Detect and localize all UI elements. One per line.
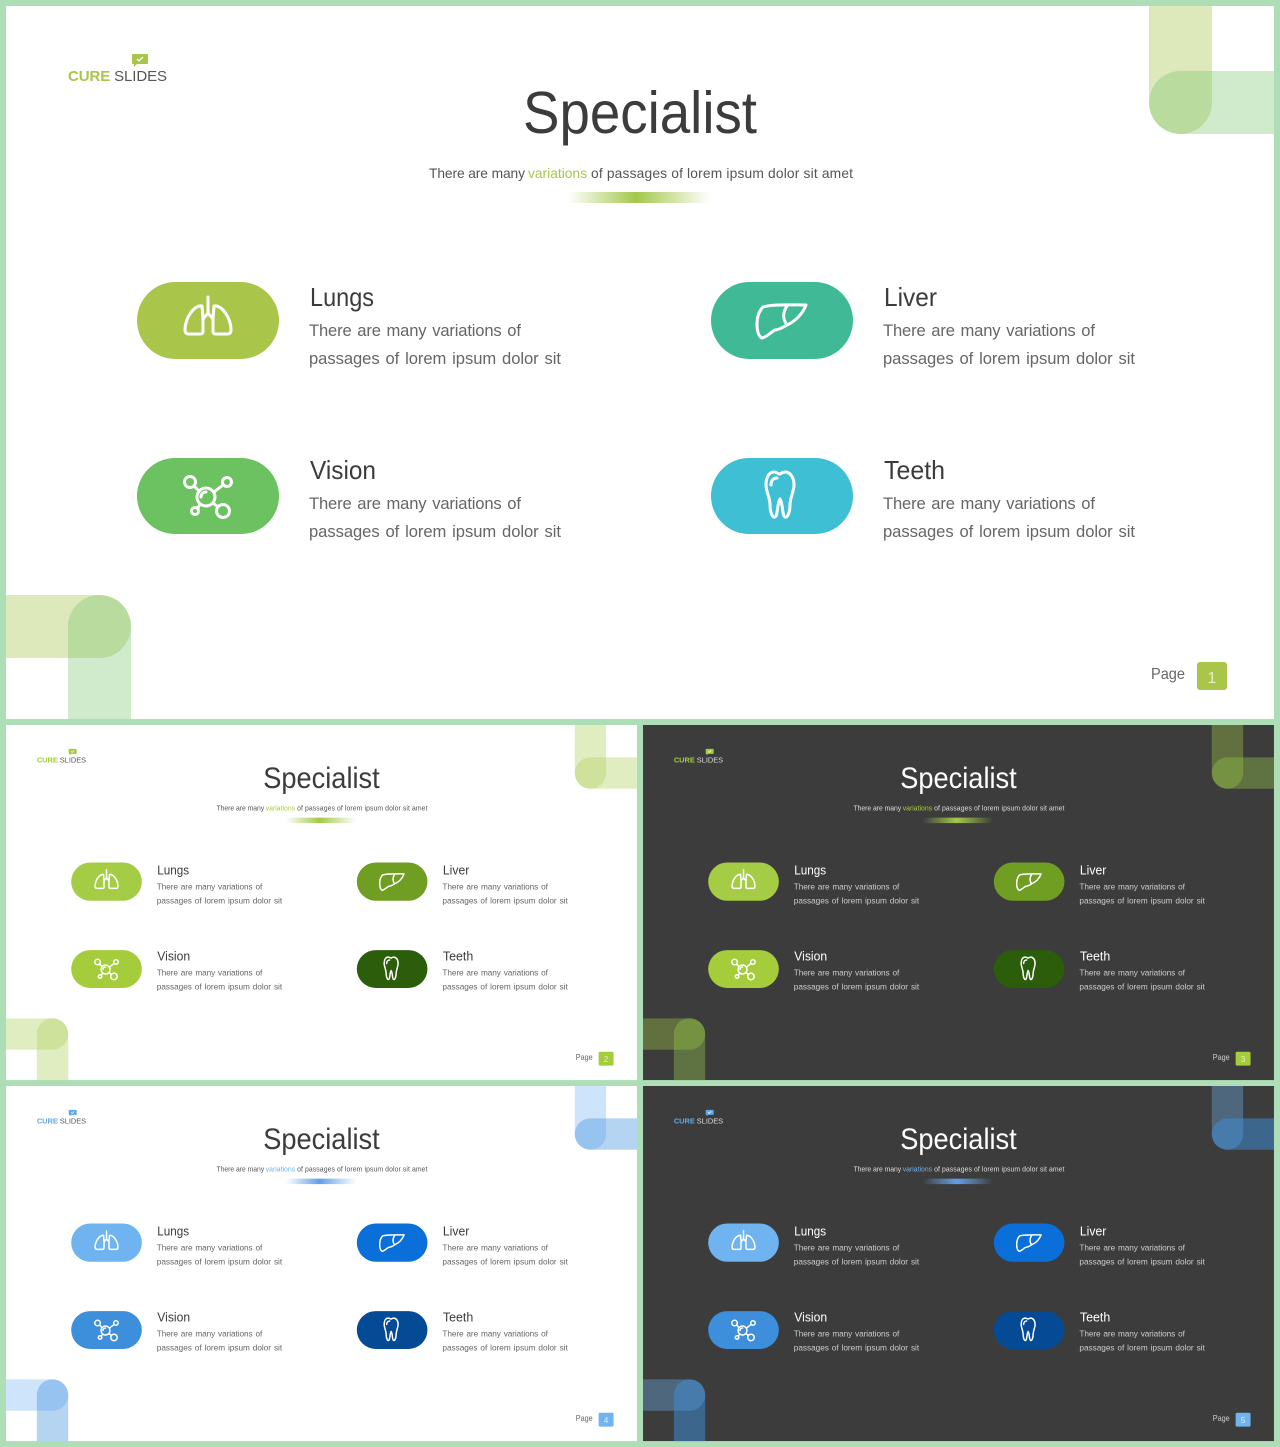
- icon pill: molecule: [708, 1311, 779, 1349]
- subtitle: of passages of lorem ipsum dolor sit amet: [297, 806, 428, 813]
- icon pill: liver: [994, 1223, 1064, 1262]
- subtitle: of passages of lorem ipsum dolor sit amet: [591, 166, 853, 181]
- gradient underline: [923, 1179, 993, 1184]
- text: Teeth: passages of lorem ipsum dolor sit: [1079, 982, 1205, 991]
- text: Liver: passages of lorem ipsum dolor sit: [1079, 896, 1205, 905]
- text: Liver: There are many variations of: [442, 1243, 549, 1252]
- subtitle: [216, 1167, 428, 1174]
- corner decoration: bottom left: [643, 1379, 705, 1441]
- text: Liver: passages of lorem ipsum dolor sit: [442, 1257, 568, 1266]
- icon pill: lungs: [137, 282, 279, 359]
- text: Lungs: There are many variations of: [794, 882, 900, 891]
- corner decoration: bottom left: [6, 595, 131, 719]
- title: Specialist: [900, 762, 1017, 795]
- text: Teeth: There are many variations of: [442, 1329, 549, 1338]
- text: Vision: There are many variations of: [309, 494, 521, 513]
- text: Lungs: Lungs: [310, 282, 374, 312]
- text: Lungs: passages of lorem ipsum dolor sit: [794, 896, 920, 905]
- text: Teeth: [442, 949, 568, 991]
- text: Liver: [442, 1223, 568, 1266]
- subtitle: [853, 1167, 1065, 1174]
- page number: Page: [1151, 666, 1185, 683]
- item: Vision: [137, 455, 561, 541]
- text: Lungs: There are many variations of: [157, 1243, 263, 1252]
- icon pill: molecule: [708, 950, 779, 988]
- logo: CURE SLIDES: [37, 1116, 86, 1125]
- page number: [576, 1413, 614, 1427]
- text: Vision: [309, 455, 561, 541]
- text: Lungs: [309, 282, 561, 368]
- text: Liver: [1079, 862, 1205, 905]
- item: Vision: [708, 1310, 920, 1352]
- text: Vision: [794, 949, 920, 991]
- text: Vision: Vision: [310, 455, 376, 485]
- page number: Page: [576, 1053, 593, 1062]
- page number: Page: [1213, 1053, 1230, 1062]
- page number: 4: [604, 1416, 609, 1425]
- text: Liver: Liver: [443, 1223, 470, 1238]
- logo: [674, 749, 723, 764]
- icon pill: molecule: [137, 458, 279, 534]
- text: Teeth: There are many variations of: [442, 968, 549, 977]
- text: Teeth: [442, 1310, 568, 1352]
- subtitle: of passages of lorem ipsum dolor sit amet: [934, 806, 1065, 813]
- text: Liver: passages of lorem ipsum dolor sit: [442, 896, 568, 905]
- gradient underline: [568, 192, 710, 203]
- icon pill: tooth: [711, 458, 853, 534]
- corner decoration: top right: [1212, 1086, 1274, 1150]
- icon pill: liver: [994, 862, 1064, 901]
- text: Vision: passages of lorem ipsum dolor sit: [794, 982, 920, 991]
- icon pill: lungs: [71, 1223, 142, 1262]
- text: Lungs: There are many variations of: [794, 1243, 900, 1252]
- panel: slide 2, light green theme: [6, 725, 637, 1080]
- corner decoration: bottom left: [643, 1018, 705, 1080]
- text: Teeth: There are many variations of: [1079, 1329, 1186, 1338]
- subtitle: variations: [266, 806, 296, 813]
- title: Specialist: [900, 1123, 1017, 1156]
- text: Teeth: Teeth: [443, 949, 473, 964]
- subtitle: variations: [266, 1167, 296, 1174]
- corner decoration: top right: [1212, 725, 1274, 789]
- subtitle: variations: [903, 1167, 933, 1174]
- subtitle: variations: [528, 166, 587, 181]
- subtitle: of passages of lorem ipsum dolor sit amet: [934, 1167, 1065, 1174]
- text: Teeth: passages of lorem ipsum dolor sit: [883, 522, 1135, 541]
- text: Liver: There are many variations of: [442, 882, 549, 891]
- panel: slide 4, light blue theme: [6, 1086, 637, 1441]
- icon pill: liver: [357, 862, 427, 901]
- text: Teeth: There are many variations of: [883, 494, 1095, 513]
- text: Vision: Vision: [157, 1310, 190, 1325]
- text: Liver: [883, 282, 1135, 368]
- text: Lungs: There are many variations of: [309, 321, 521, 340]
- icon pill: lungs: [71, 862, 142, 901]
- text: Liver: Liver: [1080, 1223, 1107, 1238]
- item: Teeth: [711, 455, 1135, 541]
- text: Vision: passages of lorem ipsum dolor sit: [157, 1343, 283, 1352]
- item: Vision: [71, 1310, 283, 1352]
- text: Lungs: [794, 862, 920, 905]
- icon pill: lungs: [708, 1223, 779, 1262]
- page number: Page: [1213, 1414, 1230, 1423]
- icon pill: liver: [711, 282, 853, 359]
- text: Teeth: passages of lorem ipsum dolor sit: [442, 1343, 568, 1352]
- text: Vision: passages of lorem ipsum dolor sit: [157, 982, 283, 991]
- item: Lungs: [708, 862, 920, 905]
- page number: [1213, 1052, 1251, 1066]
- text: Vision: [794, 1310, 920, 1352]
- corner decoration: bottom left: [6, 1379, 68, 1441]
- item: Lungs: [708, 1223, 920, 1266]
- subtitle: [853, 806, 1065, 813]
- item: Teeth: [994, 949, 1205, 991]
- logo: [37, 749, 86, 764]
- text: Teeth: Teeth: [1080, 949, 1110, 964]
- corner decoration: top right: [575, 1086, 637, 1150]
- logo: CURE SLIDES: [674, 1116, 723, 1125]
- text: Teeth: [1079, 949, 1205, 991]
- text: Vision: Vision: [157, 949, 190, 964]
- subtitle: There are many: [216, 1167, 265, 1174]
- text: Lungs: passages of lorem ipsum dolor sit: [309, 349, 561, 368]
- text: Lungs: passages of lorem ipsum dolor sit: [157, 896, 283, 905]
- subtitle: [429, 166, 853, 181]
- logo: [68, 54, 167, 85]
- text: Teeth: passages of lorem ipsum dolor sit: [442, 982, 568, 991]
- text: Vision: There are many variations of: [794, 1329, 900, 1338]
- text: Vision: There are many variations of: [157, 1329, 263, 1338]
- corner decoration: top right: [575, 725, 637, 789]
- gradient underline: [286, 818, 356, 823]
- icon pill: liver: [357, 1223, 427, 1262]
- item: Lungs: [137, 282, 561, 368]
- item: Lungs: [71, 862, 283, 905]
- item: Liver: [357, 1223, 568, 1266]
- text: Liver: Liver: [1080, 862, 1107, 877]
- icon pill: molecule: [71, 1311, 142, 1349]
- text: Vision: [157, 949, 283, 991]
- page number: 1: [1208, 670, 1217, 687]
- text: Lungs: passages of lorem ipsum dolor sit: [794, 1257, 920, 1266]
- text: Lungs: Lungs: [157, 1223, 189, 1238]
- item: Vision: [708, 949, 920, 991]
- text: Lungs: passages of lorem ipsum dolor sit: [157, 1257, 283, 1266]
- text: Liver: passages of lorem ipsum dolor sit: [1079, 1257, 1205, 1266]
- text: Teeth: [883, 455, 1135, 541]
- text: Liver: There are many variations of: [1079, 882, 1186, 891]
- text: Liver: Liver: [443, 862, 470, 877]
- subtitle: There are many: [216, 806, 265, 813]
- text: Teeth: Teeth: [884, 455, 945, 485]
- text: Lungs: Lungs: [157, 862, 189, 877]
- logo: CURE SLIDES: [68, 68, 167, 85]
- text: Liver: passages of lorem ipsum dolor sit: [883, 349, 1135, 368]
- text: Lungs: [157, 1223, 283, 1266]
- subtitle: of passages of lorem ipsum dolor sit amet: [297, 1167, 428, 1174]
- item: Teeth: [994, 1310, 1205, 1352]
- icon pill: lungs: [708, 862, 779, 901]
- panel: slide 3, dark green theme: [643, 725, 1274, 1080]
- page number: [1151, 662, 1227, 690]
- logo: CURE SLIDES: [37, 755, 86, 764]
- item: Lungs: [71, 1223, 283, 1266]
- item: Vision: [71, 949, 283, 991]
- icon pill: molecule: [71, 950, 142, 988]
- item: Liver: [994, 862, 1205, 905]
- item: Liver: [994, 1223, 1205, 1266]
- corner decoration: bottom left: [6, 1018, 68, 1080]
- icon pill: tooth: [994, 1311, 1064, 1349]
- icon pill: tooth: [994, 950, 1064, 988]
- text: Vision: There are many variations of: [157, 968, 263, 977]
- text: Teeth: Teeth: [443, 1310, 473, 1325]
- text: Lungs: There are many variations of: [157, 882, 263, 891]
- text: Teeth: Teeth: [1080, 1310, 1110, 1325]
- item: Liver: [711, 282, 1135, 368]
- text: Liver: Liver: [884, 282, 937, 312]
- page number: 5: [1241, 1416, 1246, 1425]
- text: Teeth: [1079, 1310, 1205, 1352]
- page number: [1213, 1413, 1251, 1427]
- text: Liver: [442, 862, 568, 905]
- text: Vision: Vision: [794, 1310, 827, 1325]
- logo: CURE SLIDES: [674, 755, 723, 764]
- text: Teeth: There are many variations of: [1079, 968, 1186, 977]
- icon pill: tooth: [357, 950, 427, 988]
- text: Vision: passages of lorem ipsum dolor sit: [309, 522, 561, 541]
- title: Specialist: [523, 80, 757, 146]
- text: Lungs: [157, 862, 283, 905]
- panel: main slide, green and teal theme: [6, 6, 1274, 719]
- text: Vision: There are many variations of: [794, 968, 900, 977]
- page number: 3: [1241, 1055, 1246, 1064]
- corner decoration: top right: [1149, 6, 1274, 134]
- logo: [674, 1110, 723, 1125]
- text: Teeth: passages of lorem ipsum dolor sit: [1079, 1343, 1205, 1352]
- page number: 2: [604, 1055, 609, 1064]
- text: Liver: [1079, 1223, 1205, 1266]
- page number: Page: [576, 1414, 593, 1423]
- icon pill: tooth: [357, 1311, 427, 1349]
- text: Liver: There are many variations of: [883, 321, 1095, 340]
- subtitle: There are many: [429, 166, 525, 181]
- panel: slide 5, dark blue theme: [643, 1086, 1274, 1441]
- text: Liver: There are many variations of: [1079, 1243, 1186, 1252]
- text: Lungs: Lungs: [794, 1223, 826, 1238]
- text: Lungs: Lungs: [794, 862, 826, 877]
- text: Lungs: [794, 1223, 920, 1266]
- subtitle: [216, 806, 428, 813]
- title: Specialist: [263, 1123, 380, 1156]
- item: Teeth: [357, 949, 568, 991]
- subtitle: variations: [903, 806, 933, 813]
- subtitle: There are many: [853, 806, 902, 813]
- logo: [37, 1110, 86, 1125]
- title: Specialist: [263, 762, 380, 795]
- text: Vision: passages of lorem ipsum dolor sit: [794, 1343, 920, 1352]
- gradient underline: [923, 818, 993, 823]
- page number: [576, 1052, 614, 1066]
- subtitle: There are many: [853, 1167, 902, 1174]
- item: Liver: [357, 862, 568, 905]
- item: Teeth: [357, 1310, 568, 1352]
- text: Vision: [157, 1310, 283, 1352]
- text: Vision: Vision: [794, 949, 827, 964]
- gradient underline: [286, 1179, 356, 1184]
